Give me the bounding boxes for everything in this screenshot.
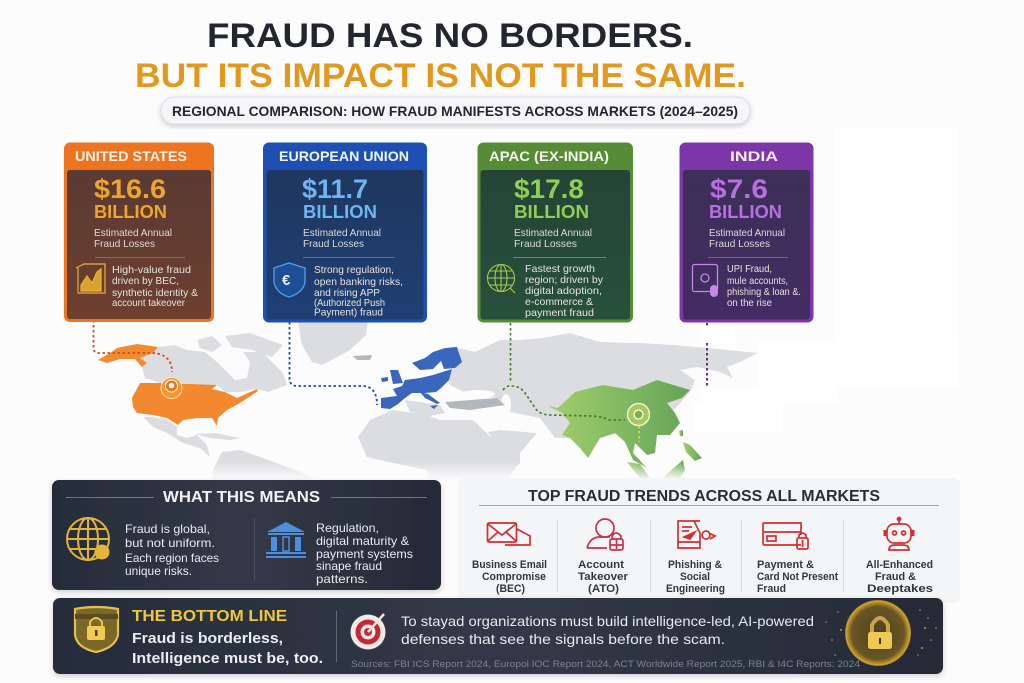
- description: digital adoption,: [525, 285, 602, 297]
- caption: Estimated Annual: [303, 227, 381, 239]
- caption: [94, 227, 172, 250]
- map: Black Sea and Caspian gaps: [461, 390, 511, 416]
- description: Strong regulation,: [314, 264, 394, 276]
- map: Alaska: [98, 344, 158, 367]
- icon: globe: [488, 264, 515, 293]
- trend: payment and card not present fraud: Payment &: [757, 559, 814, 571]
- trend: business email compromise: Compromise: [482, 571, 546, 583]
- icon: euro shield: €: [282, 272, 291, 289]
- white patch: east of China lower: [694, 403, 783, 432]
- trend: account takeover: [578, 519, 629, 595]
- trend: payment and card not present fraud: Fraud: [757, 583, 786, 595]
- connector: United States: [94, 300, 172, 372]
- text: regulation: patterns.: [316, 572, 368, 586]
- description: Fastest growth: [525, 263, 595, 275]
- text: global: Fraud is global,: [125, 522, 210, 536]
- text: regulation: [316, 521, 413, 586]
- text: global: Each region faces: [125, 551, 219, 565]
- caption: Fraud Losses: [709, 238, 770, 250]
- connector: APAC: [503, 298, 625, 420]
- description: synthetic identity &: [112, 287, 198, 299]
- description: payment fraud: [525, 307, 594, 319]
- heading: THE BOTTOM LINE: [132, 608, 287, 625]
- loss figure: $7.6: [710, 174, 768, 204]
- trend: business email compromise: [472, 523, 547, 595]
- unit: BILLION: [94, 202, 167, 222]
- trend: payment and card not present fraud: [757, 523, 838, 595]
- heading: TOP FRAUD TRENDS ACROSS ALL MARKETS: [528, 488, 880, 505]
- text: global: but not uniform.: [125, 536, 215, 550]
- caption: [514, 227, 592, 250]
- card heading: UNITED STATES: [75, 148, 187, 164]
- trend: phishing and social engineering: Engineering: [666, 583, 725, 595]
- loss figure: $11.7: [302, 174, 368, 204]
- trend: phishing and social engineering: Social: [680, 571, 710, 583]
- white patch: upper right: [835, 128, 957, 340]
- caption: [709, 227, 785, 250]
- statement: Fraud is borderless,: [132, 630, 283, 647]
- title: FRAUD HAS NO BORDERS.: [207, 17, 693, 55]
- trend: account takeover: Takeover: [578, 571, 629, 583]
- connector: India: [706, 298, 708, 386]
- card: European Union: [263, 142, 427, 322]
- icon: rising chart: [76, 264, 105, 293]
- trend: phishing and social engineering: Phishing &: [668, 559, 722, 571]
- text: regulation: payment systems: [316, 547, 413, 561]
- trend: payment and card not present fraud: Card Not Present: [757, 571, 838, 583]
- text: regulation: sinape fraud: [316, 559, 382, 573]
- description: [112, 264, 198, 309]
- map: European Union: [381, 347, 462, 409]
- unit: BILLION: [303, 202, 377, 222]
- map: APAC region: [548, 380, 702, 478]
- caption: Estimated Annual: [94, 227, 172, 239]
- loss figure: $16.6: [94, 174, 166, 204]
- panel: top fraud trends: [458, 478, 960, 603]
- map fade: [40, 462, 740, 480]
- description: and rising APP: [314, 287, 380, 299]
- trend: business email compromise: Business Email: [472, 559, 547, 571]
- caption: Fraud Losses: [94, 238, 155, 250]
- call to action: [401, 613, 814, 647]
- statement: [132, 630, 323, 667]
- card: India: [680, 142, 814, 322]
- sources: Sources: FBI ICS Report 2024, Europol IOC Report 2024, ACT Worldwide Report 2025, RBI & I4C Reports: 2024: [351, 659, 860, 669]
- description: UPI Fraud,: [727, 263, 772, 275]
- description: driven by BEC,: [112, 275, 179, 287]
- description: (Authorized Push: [314, 297, 385, 309]
- world map: [40, 322, 958, 480]
- white patch: right of Russia: [758, 340, 958, 387]
- title: [135, 17, 746, 95]
- statement: Intelligence must be, too.: [132, 650, 323, 667]
- description: open banking risks,: [314, 276, 403, 288]
- icon: glowing padlock: [825, 600, 937, 666]
- icon: bank: [266, 522, 306, 558]
- pin: United States: [161, 378, 182, 398]
- icon: globe: [67, 518, 109, 560]
- caption: Fraud Losses: [514, 238, 577, 250]
- trend: phishing and social engineering: [666, 521, 725, 595]
- description: High-value fraud: [112, 264, 191, 276]
- unit: BILLION: [514, 202, 589, 222]
- description: phishing & loan &.: [727, 286, 801, 298]
- card heading: APAC (EX-INDIA): [489, 148, 609, 164]
- title: BUT ITS IMPACT IS NOT THE SAME.: [135, 57, 746, 95]
- trend: AI-enhanced fraud and deepfakes: Deeptakes: [867, 583, 933, 595]
- trend: AI-enhanced fraud and deepfakes: Fraud &: [875, 571, 916, 583]
- icon: gold shield lock: [75, 607, 118, 652]
- pin: APAC: [628, 404, 650, 442]
- icon: euro shield: [274, 263, 305, 297]
- description: [314, 264, 403, 318]
- description: [727, 263, 801, 309]
- caption: Fraud Losses: [303, 238, 364, 250]
- description: on the rise: [727, 297, 772, 309]
- text: global: [125, 522, 219, 578]
- text: global: unique risks.: [125, 564, 192, 578]
- map: grey landmasses: [140, 322, 758, 480]
- card: United States: [64, 142, 214, 322]
- caption: [303, 227, 381, 250]
- card heading: INDIA: [730, 148, 778, 164]
- description: account takeover: [112, 297, 185, 309]
- caption: Estimated Annual: [709, 227, 785, 239]
- card heading: EUROPEAN UNION: [279, 148, 409, 164]
- text: regulation: digital maturity &: [316, 534, 409, 548]
- text: regulation: Regulation,: [316, 521, 379, 535]
- card: APAC ex-India: [478, 142, 633, 322]
- panel: the bottom line: [53, 598, 943, 674]
- description: mule accounts,: [727, 275, 788, 287]
- description: e-commerce &: [525, 296, 593, 308]
- icon: target: [350, 614, 386, 650]
- map: Iceland and Turkey: [353, 355, 505, 410]
- panel: what this means: [52, 480, 441, 590]
- loss figure: $17.8: [514, 174, 584, 204]
- subtitle pill: [161, 97, 750, 124]
- subtitle pill: REGIONAL COMPARISON: HOW FRAUD MANIFESTS ACROSS MARKETS (2024–2025): [172, 103, 738, 119]
- description: Payment) fraud: [314, 306, 383, 318]
- trend: account takeover: (ATO): [588, 583, 619, 595]
- trend: account takeover: Account: [578, 559, 624, 571]
- description: region; driven by: [525, 274, 604, 286]
- white patch: below India card: [700, 326, 735, 343]
- trend: AI-enhanced fraud and deepfakes: All-Enhanced: [866, 559, 933, 571]
- caption: Estimated Annual: [514, 227, 592, 239]
- trend: business email compromise: (BEC): [496, 583, 525, 595]
- map: continental United States: [132, 383, 258, 426]
- call to action: defenses that see the signals before the scam.: [401, 631, 725, 647]
- heading: WHAT THIS MEANS: [163, 489, 320, 506]
- icon: mobile payment: [692, 264, 718, 297]
- description: [525, 263, 604, 319]
- unit: BILLION: [709, 202, 782, 222]
- white patch: east of China: [700, 387, 837, 403]
- connector: European Union: [290, 302, 377, 405]
- trend: AI-enhanced fraud and deepfakes: [866, 518, 933, 595]
- call to action: To stayad organizations must build intelligence-led, AI-powered: [401, 613, 814, 629]
